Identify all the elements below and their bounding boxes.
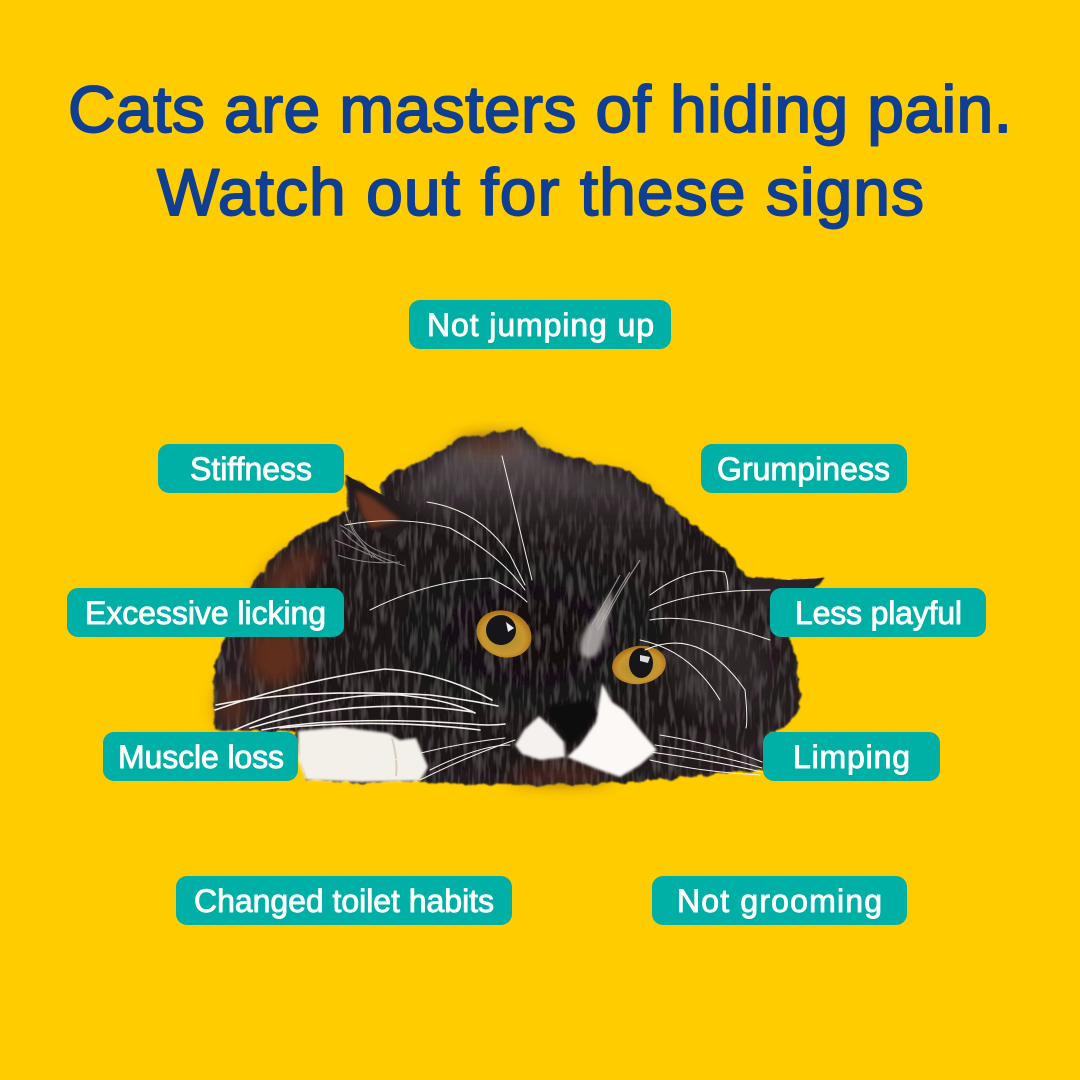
white paw (298, 727, 428, 782)
grey ear tufts (335, 510, 405, 566)
label: Not jumping up (409, 300, 671, 349)
title: Watch out for these signs (157, 155, 924, 229)
grey cheek highlight right (672, 613, 768, 717)
label: Grumpiness: Grumpiness (717, 451, 890, 487)
forehead white streak (580, 560, 640, 658)
brown fur patches on back (218, 437, 610, 782)
label: Less playful: Less playful (795, 595, 962, 631)
label: Stiffness (158, 444, 344, 493)
label: Grumpiness (701, 444, 907, 493)
label: Muscle loss: Muscle loss (118, 739, 284, 775)
label: Excessive licking (67, 588, 344, 637)
label: Not grooming: Not grooming (677, 883, 882, 919)
ear inner (355, 490, 400, 528)
white muzzle left (515, 716, 565, 760)
left eye (470, 603, 538, 665)
label: Not grooming (652, 876, 907, 925)
label: Stiffness: Stiffness (190, 451, 312, 487)
photo: black and white cat lying down (214, 428, 824, 785)
label: Less playful (770, 588, 986, 637)
title (68, 72, 1012, 229)
nose (548, 700, 597, 746)
ear: crisp tip over fur (346, 475, 420, 540)
label: Excessive licking: Excessive licking (85, 595, 326, 631)
whiskers (215, 456, 770, 780)
label: Muscle loss (103, 732, 298, 781)
white muzzle right (567, 683, 657, 777)
label: Changed toilet habits: Changed toilet habits (194, 883, 494, 919)
label: Changed toilet habits (176, 876, 512, 925)
label: Limping (763, 732, 940, 781)
title: Cats are masters of hiding pain. (68, 72, 1012, 146)
grey fur highlight on top of head (400, 438, 690, 565)
ear tip right: crisp (745, 578, 824, 610)
label: Not jumping up: Not jumping up (427, 307, 654, 343)
right eye (610, 642, 668, 688)
cat body silhouette (214, 428, 824, 785)
label: Limping: Limping (793, 739, 910, 775)
